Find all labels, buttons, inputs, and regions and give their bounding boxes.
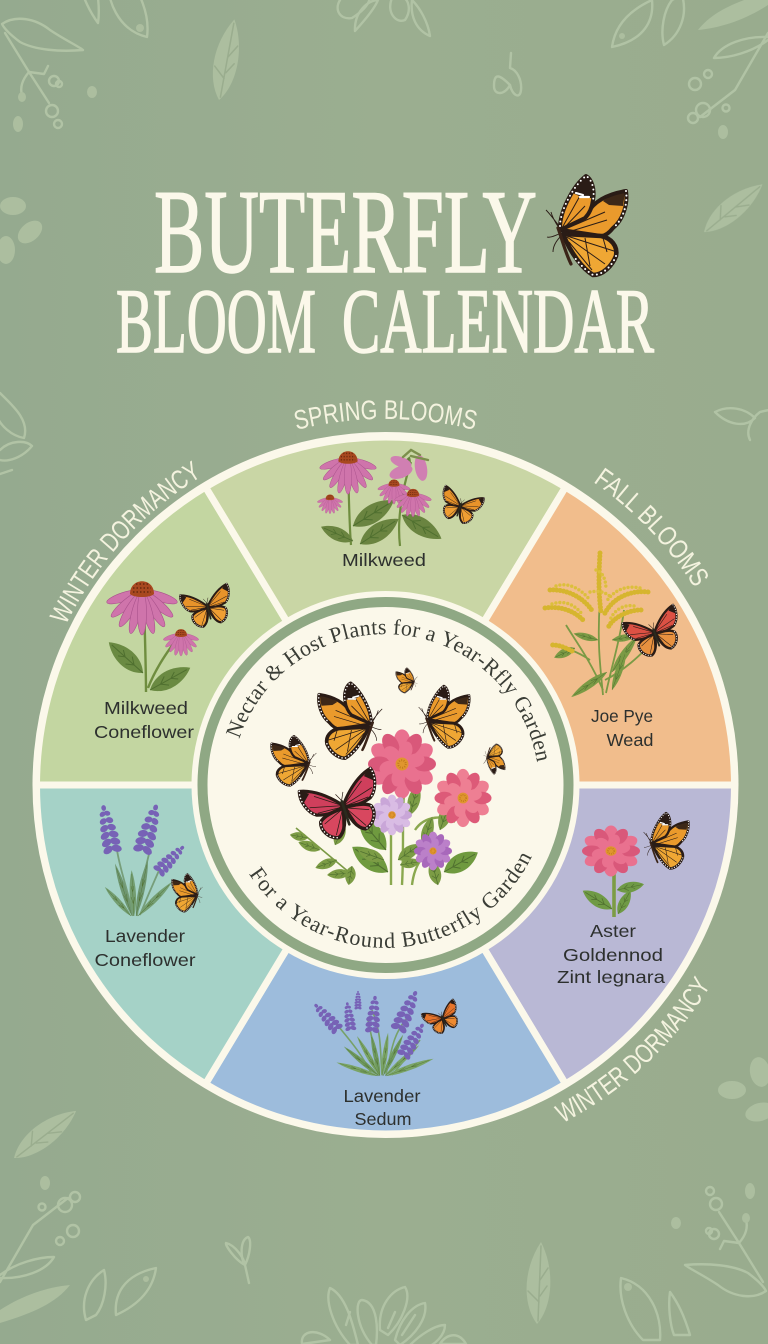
illustration: center bouquet (289, 729, 492, 887)
season label: fall blooms: FALL BLOOMS (594, 468, 708, 586)
decoration: top-left sprig (2, 0, 148, 132)
panel: blue bottom (206, 785, 566, 1134)
icon: center butterfly large (319, 683, 382, 758)
cream outer disc (192, 591, 580, 979)
center curved text: top: Nectar & Host Plants for a Year-Rfly Garden (226, 619, 547, 762)
illustration: goldenrod (545, 553, 650, 700)
center disc (192, 591, 580, 979)
decoration: bottom filled leaf (527, 1242, 550, 1324)
label: Aster Goldennod Zint legnara: Zint legnara (557, 967, 665, 987)
label: Lavender Sedum: Sedum (354, 1109, 412, 1129)
decoration: top filled leaf (209, 17, 244, 102)
icon: teal panel butterfly (172, 874, 203, 912)
panel: spring blooms (206, 437, 566, 785)
panel: lavender-purple right (386, 785, 734, 1084)
icon: center butterfly right (419, 686, 469, 747)
decoration: right line leaf (715, 408, 768, 440)
decoration: top-right sprig (612, 0, 768, 139)
decoration: lower-left filled leaf (8, 1100, 82, 1168)
center curved text: bottom: For a Year-Round Butterfly Garden (249, 854, 532, 948)
label: Lavender Sedum (344, 1086, 421, 1129)
label: Milkweed Coneflower: Milkweed (104, 698, 188, 718)
season label: spring blooms: SPRING BLOOMS (294, 400, 477, 429)
label: Milkweed Coneflower (94, 698, 194, 742)
icon: spring butterfly (436, 485, 485, 527)
illustration: lavender left (93, 801, 189, 918)
season label: winter dormancy left: WINTER DORMANCY (49, 460, 198, 622)
icon: side butterfly right (644, 813, 689, 868)
label: Joe Pye Wead (591, 706, 654, 750)
decoration: bottom-left sprig (0, 1176, 156, 1323)
icon: center red butterfly (298, 768, 389, 845)
title word: Bloom: BLOOM (116, 270, 316, 372)
decoration: left line flower (0, 393, 32, 474)
label: Milkweed Coneflower: Coneflower (94, 722, 194, 742)
title line: Butterfly: BUTERFLY (154, 165, 537, 298)
decoration: bottom small bud (226, 1237, 250, 1283)
label: Lavender Coneflower: Lavender (105, 926, 185, 946)
green ring (202, 602, 568, 968)
icon: winter butterfly (179, 584, 236, 630)
decoration: lower-right petal cluster (718, 1055, 768, 1125)
icon: center butterfly left (271, 736, 316, 786)
panel: teal left (36, 785, 385, 1084)
title (116, 165, 654, 372)
wheel cream base (32, 432, 738, 1138)
label: Joe Pye Wead: Wead (606, 730, 654, 750)
season label: winter dormancy right: WINTER DORMANCY (554, 976, 708, 1122)
decoration: right filled leaf (698, 174, 768, 241)
icon: center butterfly tiny top (396, 668, 418, 693)
label: Lavender Coneflower (94, 926, 196, 970)
decoration: top small bud (494, 53, 521, 95)
illustration: lavender bottom (309, 987, 434, 1079)
label: Joe Pye Wead: Joe Pye (591, 706, 653, 726)
illustration: zinnia (579, 826, 645, 917)
label: Lavender Coneflower: Coneflower (94, 950, 196, 970)
icon: fall red butterfly (622, 605, 688, 661)
label: Lavender Sedum: Lavender (344, 1086, 421, 1106)
icon: title monarch butterfly (546, 176, 626, 275)
label: Milkweed: Milkweed (342, 550, 426, 570)
illustration: spring coneflowers (317, 450, 446, 551)
label: Aster Goldennod Zint legnara (557, 921, 665, 987)
icon: blue panel butterfly (421, 999, 464, 1038)
label: Aster Goldennod Zint legnara: Goldennod (563, 945, 663, 965)
panel: winter dormancy top-left (36, 487, 386, 785)
label: Aster Goldennod Zint legnara: Aster (590, 921, 636, 941)
decoration: left petal cluster (0, 197, 47, 264)
icon: center butterfly small right (483, 744, 505, 774)
seasonal wheel (32, 432, 738, 1138)
illustration: winter coneflowers (103, 581, 199, 698)
decoration: bottom-right sprig (620, 1183, 766, 1340)
decoration: top flower (338, 0, 430, 36)
decoration: bottom flower (302, 1287, 466, 1344)
panel: fall blooms (386, 487, 734, 785)
